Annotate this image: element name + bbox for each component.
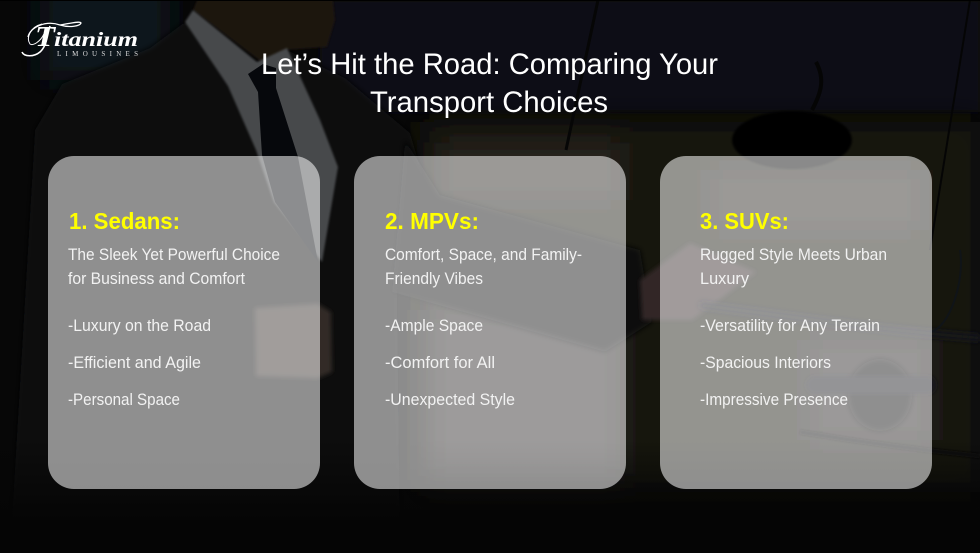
shirt <box>185 10 338 262</box>
title: Let’s Hit the Road: Comparing Your <box>261 48 718 81</box>
logo: Titanium Limousines: itanium <box>54 29 138 51</box>
subheading: MPVs: Comfort, Space, and Family- <box>385 246 582 264</box>
car roof hook and black ellipse <box>732 111 852 169</box>
bullet list: SUVs: -Spacious Interiors <box>700 354 831 372</box>
title <box>261 48 718 119</box>
heading: sedans: 1. Sedans: <box>69 208 180 234</box>
bullet list: sedans <box>68 317 211 409</box>
logo: Titanium Limousines: T <box>35 22 57 53</box>
heading: SUVs: 3. SUVs: <box>700 208 789 234</box>
bullet list: sedans: -Luxury on the Road <box>68 317 211 335</box>
logo: Titanium Limousines <box>22 22 138 58</box>
subheading: SUVs: Luxury <box>700 270 750 288</box>
left hand <box>255 304 332 378</box>
panel: MPVs <box>354 156 626 489</box>
tie <box>248 64 318 262</box>
subheading: MPVs <box>385 246 582 288</box>
subheading: MPVs: Friendly Vibes <box>385 270 483 288</box>
panel: SUVs <box>660 156 932 489</box>
bullet list: SUVs: -Impressive Presence <box>700 391 848 409</box>
subheading: SUVs: Rugged Style Meets Urban <box>700 246 887 264</box>
bullet list: MPVs: -Ample Space <box>385 317 483 335</box>
bullet list: sedans: -Efficient and Agile <box>68 354 201 372</box>
title: Transport Choices <box>370 86 608 119</box>
subheading: SUVs <box>700 246 887 288</box>
logo: Titanium Limousines: LIMOUSINES <box>57 50 138 58</box>
suit sleeve <box>392 140 652 352</box>
bullet list: MPVs <box>385 317 515 409</box>
right hand <box>640 243 756 320</box>
bullet list: sedans: -Personal Space <box>68 391 180 409</box>
bullet list: MPVs: -Unexpected Style <box>385 391 515 409</box>
blue upper background <box>40 0 170 80</box>
panel: sedans <box>48 156 320 489</box>
bullet list: SUVs <box>700 317 880 409</box>
bullet list: SUVs: -Versatility for Any Terrain <box>700 317 880 335</box>
subheading: sedans <box>68 246 280 288</box>
subheading: sedans: The Sleek Yet Powerful Choice <box>68 246 280 264</box>
bullet list: MPVs: -Comfort for All <box>385 354 495 372</box>
wood reflection <box>420 122 980 492</box>
subheading: sedans: for Business and Comfort <box>68 270 245 288</box>
suit body <box>10 22 430 553</box>
bottom vignette <box>0 440 980 520</box>
face and neck <box>193 0 335 63</box>
heading: MPVs: 2. MPVs: <box>385 208 479 234</box>
door handle <box>700 305 980 456</box>
